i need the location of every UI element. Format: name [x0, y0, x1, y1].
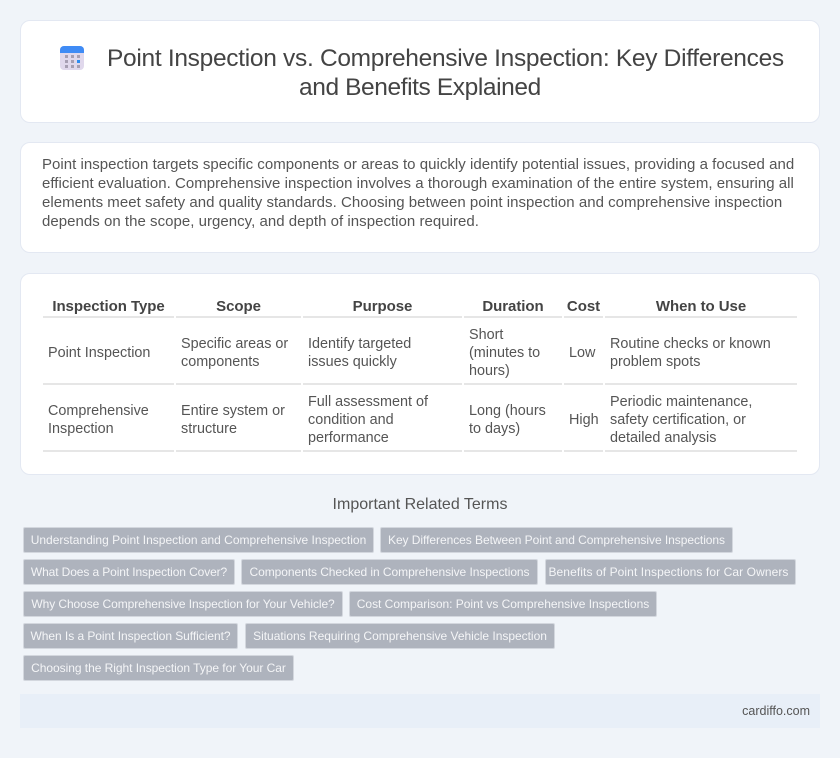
comparison table: Cost [567, 298, 600, 315]
row: comprehensive inspection: Entire system or [181, 403, 285, 419]
row: point inspection [48, 327, 771, 379]
text block: summary: Point inspection targets specific components or areas to quickly identify potential issues, providing a focused and [42, 156, 794, 173]
related term tags: Why Choose Comprehensive Inspection for Your Vehicle? [31, 597, 335, 611]
heading: important related terms: Important Related Terms [333, 496, 507, 513]
comparison table: Purpose [353, 298, 412, 315]
related term tags: Situations Requiring Comprehensive Vehicle Inspection [253, 629, 547, 643]
related term tags: Choosing the Right Inspection Type for Your Car [31, 661, 286, 675]
row: comprehensive inspection: condition and [308, 412, 394, 428]
related term tags: Benefits of Point Inspections for Car Owners [548, 565, 789, 579]
title: Point Inspection vs. Comprehensive Inspection: Key Differences [107, 45, 784, 72]
title [107, 45, 784, 101]
text block: summary [42, 156, 794, 230]
panel: title card [20, 20, 820, 123]
row: comprehensive inspection: detailed analysis [610, 430, 716, 446]
row: comprehensive inspection: Inspection [48, 421, 114, 437]
related term tags: Components Checked in Comprehensive Inspections [249, 565, 530, 579]
row: comprehensive inspection: Long (hours [469, 403, 546, 419]
table header [52, 298, 746, 315]
related term tags: Understanding Point Inspection and Comprehensive Inspection [31, 533, 366, 547]
row: comprehensive inspection: performance [308, 430, 389, 446]
comparison table: Inspection Type [52, 298, 165, 315]
row: point inspection: Point Inspection [48, 345, 150, 361]
row: point inspection: hours) [469, 363, 510, 379]
icon: calendar [60, 46, 84, 70]
comparison table: Duration [482, 298, 544, 315]
text block: summary: elements meet safety and quality standards. Choosing between point inspection and comprehensive inspection [42, 194, 782, 211]
row: point inspection: Specific areas or [181, 336, 288, 352]
row: comprehensive inspection: safety certification, or [610, 412, 746, 428]
related term tags: When Is a Point Inspection Sufficient? [30, 629, 230, 643]
row: comprehensive inspection: structure [181, 421, 237, 437]
related term tags [23, 527, 796, 681]
row: point inspection: (minutes to [469, 345, 540, 361]
title: and Benefits Explained [299, 74, 541, 101]
row: point inspection: Short [469, 327, 503, 343]
row: comprehensive inspection: High [569, 412, 599, 428]
comparison table: Scope [216, 298, 261, 315]
row: comprehensive inspection: Comprehensive [48, 403, 149, 419]
row: point inspection: components [181, 354, 259, 370]
row: point inspection: problem spots [610, 354, 700, 370]
comparison table [43, 298, 797, 452]
related term tags: What Does a Point Inspection Cover? [31, 565, 227, 579]
row: comprehensive inspection: Full assessment of [308, 394, 428, 410]
row: point inspection: Routine checks or known [610, 336, 771, 352]
row: point inspection: Low [569, 345, 595, 361]
row: point inspection: Identify targeted [308, 336, 411, 352]
footer bar [20, 694, 820, 728]
row: comprehensive inspection: to days) [469, 421, 520, 437]
panel: summary card [20, 142, 820, 253]
text block: summary: efficient evaluation. Comprehensive inspection involves a thorough examination of the entire system, ensuring all [42, 175, 794, 192]
related term tags: Cost Comparison: Point vs Comprehensive Inspections [357, 597, 649, 611]
row: point inspection: issues quickly [308, 354, 397, 370]
footer text: source: cardiffo.com [742, 704, 810, 718]
comparison table: When to Use [656, 298, 746, 315]
row: comprehensive inspection [48, 394, 752, 446]
text block: summary: depends on the scope, urgency, and depth of inspection required. [42, 213, 479, 230]
row: comprehensive inspection: Periodic maintenance, [610, 394, 752, 410]
panel: table card [20, 273, 820, 475]
related term tags: Key Differences Between Point and Comprehensive Inspections [388, 533, 725, 547]
